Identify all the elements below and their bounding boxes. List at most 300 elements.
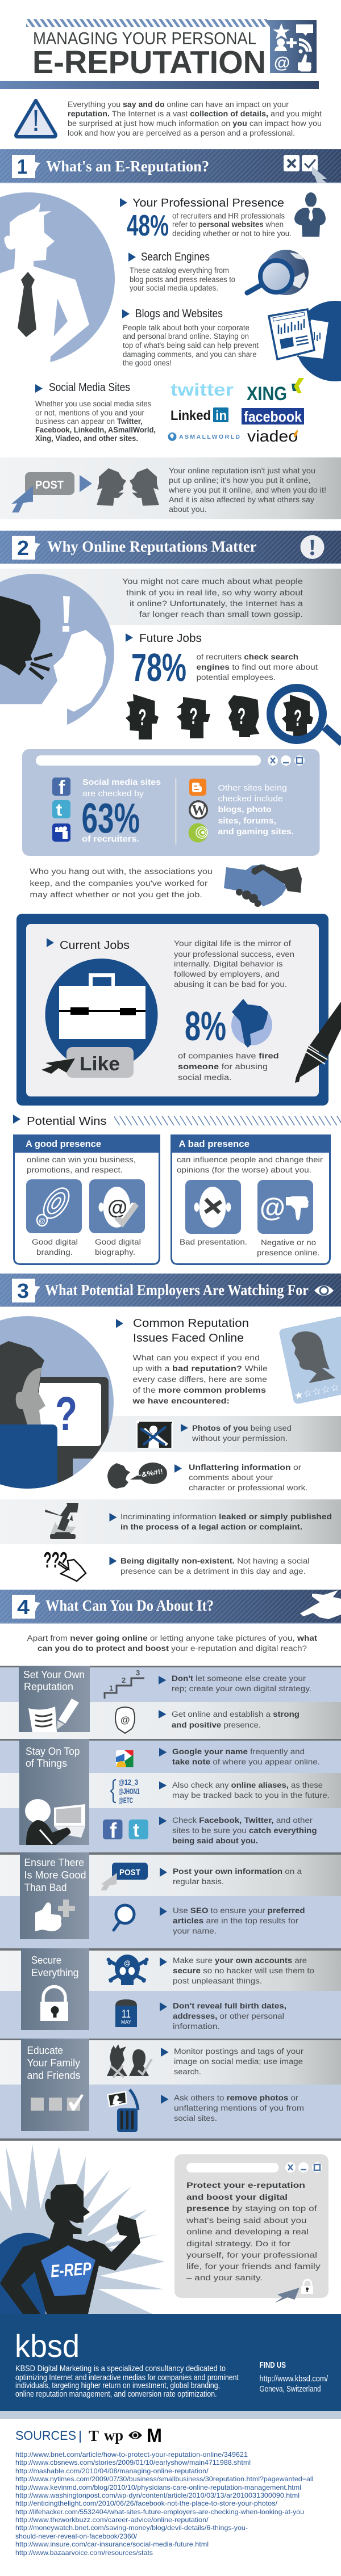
logo: kbsd: kbsd <box>15 2328 80 2364</box>
stat text: Social media sites <box>82 778 161 787</box>
advice: use seo <box>114 1905 305 1935</box>
advice: online aliases <box>111 1777 330 1805</box>
photo row: without your permission. <box>192 1434 288 1443</box>
icon: eye <box>314 1285 334 1296</box>
future jobs: of recruiters check search <box>197 653 298 661</box>
white silhouette <box>0 203 89 397</box>
chest emblem <box>41 2245 95 2296</box>
source links: http://www.bazaarvoice.com/resources/stats <box>15 2549 153 2557</box>
rated profile card <box>278 1314 341 1405</box>
panel: educate family and friends: Educate <box>27 2044 63 2056</box>
other sites text: and gaming sites. <box>218 827 294 837</box>
photo row <box>136 1421 292 1448</box>
source links: http://enticingthelight.com/2010/06/26/facebook-not-the-place-to-store-your-photos/ <box>15 2499 278 2507</box>
source links: http://lifehacker.com/5532404/what-sites-future-employers-are-checking-when-looking-at-you <box>15 2508 304 2516</box>
gray band: photos <box>57 1416 341 1452</box>
caption <box>180 1238 319 1257</box>
caption <box>32 1238 141 1257</box>
cape <box>0 2233 69 2316</box>
advice: secure accounts: secure so no hacker will use them to <box>173 1966 314 1975</box>
text <box>186 2181 321 2282</box>
icon: twitter <box>52 800 70 820</box>
unflattering row: character or professional work. <box>189 1484 308 1492</box>
advice: google your name: Google your name frequently and <box>172 1747 305 1756</box>
common reputation issues: up with a bad reputation? While <box>133 1364 268 1373</box>
panel: good presence: online can win you business, <box>27 1155 136 1164</box>
advice: google your name <box>116 1747 320 1767</box>
source links: http://www.theworkbuzz.com/career-advice/online-reputation/ <box>15 2516 209 2524</box>
text: digital strategy. Do it for <box>186 2239 291 2248</box>
panel: how you post <box>0 457 341 519</box>
unflattering row <box>107 1463 308 1492</box>
tile: bad presentation <box>185 1180 241 1234</box>
icon: thumbs up <box>298 54 311 72</box>
body <box>0 1424 57 1489</box>
advice: post own information: regular basis. <box>173 1877 224 1886</box>
question mark: ? <box>55 1387 77 1440</box>
window buttons <box>285 2162 322 2172</box>
icon: gavel <box>45 1503 78 1539</box>
logo: asmallworld <box>168 432 240 441</box>
text: abusing it can be bad for you. <box>174 980 287 989</box>
panel: more good than bad: Is More Good <box>24 1869 86 1881</box>
social media sites: Whether you use social media sites <box>35 400 151 408</box>
head 2: ? <box>190 703 198 729</box>
caption: presence online. <box>257 1249 319 1257</box>
icon: alias list <box>111 1777 140 1805</box>
your professional presence: Your Professional Presence <box>132 197 284 209</box>
advice: monitor postings: image on social media; use image <box>174 2057 303 2066</box>
social media sites: business can appear on Twitter, <box>35 417 143 426</box>
section 4 intro: can you do to protect and boost your e-reputation and digital reach? <box>38 1644 307 1653</box>
text: Your online reputation isn't just what you <box>169 467 315 475</box>
panel: gossip intro <box>0 569 341 625</box>
associations text: Who you hang out with, the associations you <box>30 867 213 876</box>
icon: twitter <box>128 1819 148 1840</box>
hero silhouette <box>0 2184 140 2314</box>
advice: post own information: Post your own information on a <box>173 1867 302 1876</box>
caption: biography. <box>95 1248 135 1257</box>
other sites text: blogs, photo <box>218 805 272 814</box>
search engines: Search Engines <box>141 251 210 263</box>
advice: check facebook twitter: Check Facebook, Twitter, and other <box>172 1816 313 1825</box>
advice: birth dates: addresses, or other personal <box>173 2012 284 2020</box>
caption: Bad presentation. <box>180 1238 247 1246</box>
icon: thumbs up and plus <box>35 1900 75 1931</box>
icon: pointing hand <box>300 1590 341 1619</box>
common reputation issues: of the more common problems <box>133 1386 266 1394</box>
blogs and websites: People talk about both your corporate <box>123 323 249 332</box>
warning mark <box>34 110 38 131</box>
icon: blogger <box>189 779 206 796</box>
advice: strong presence: Get online and establish a strong <box>172 1710 300 1718</box>
intro text: look and how you are perceived as a person and a professional. <box>68 129 295 137</box>
panel: educate family and friends <box>21 2039 89 2131</box>
panel: set your own reputation: Set Your Own <box>23 1669 85 1680</box>
illustration: person at monitor <box>0 1316 114 1498</box>
panel: more good than bad <box>20 1852 89 1939</box>
logos: publications: M <box>147 2425 162 2447</box>
source links: http://www.insure.com/car-insurance/social-media-future.html <box>15 2540 209 2548</box>
source links: http://mashable.com/2010/04/08/managing-online-reputation/ <box>15 2467 209 2475</box>
panel: gossip intro: think of you in real life, so why worry about <box>126 589 303 597</box>
source links: http://www.washingtonpost.com/wp-dyn/content/article/2010/03/13/ar2010031300090.html <box>15 2491 300 2499</box>
logo: facebook: facebook <box>244 408 302 425</box>
common reputation issues: Issues Faced Online <box>133 1332 244 1344</box>
window buttons <box>268 755 305 766</box>
tile: digital biography <box>89 1179 145 1233</box>
advice: secure accounts: Make sure your own accounts are <box>173 1956 307 1965</box>
icon: skull and crossbones: @ <box>124 1959 131 1967</box>
icon: stairs: 1 <box>109 1684 113 1692</box>
tile: digital branding <box>26 1179 82 1233</box>
post bubble: POST <box>35 479 64 491</box>
logos: publications <box>89 2425 162 2447</box>
icon: google <box>116 1750 134 1767</box>
stat text: 63% <box>82 795 140 842</box>
icon: rss <box>299 38 312 53</box>
arrow <box>80 475 92 492</box>
blogs and websites: the good ones! <box>123 359 172 367</box>
icon: at sign: @ <box>274 54 290 72</box>
panel: bad presence <box>170 1134 331 1264</box>
number badge: 4 <box>17 1595 30 1619</box>
social media sites: or not, mentions of you and your <box>35 409 144 417</box>
logo: linkedin: in <box>215 408 227 423</box>
icon: lock and cursor <box>275 2280 313 2303</box>
icon: shouting head <box>107 1463 167 1489</box>
icon: star <box>273 23 290 39</box>
panel: closing browser callout <box>174 2154 328 2303</box>
advice: create your own: Don't let someone else create your <box>172 1674 306 1683</box>
advice: secure accounts: post unpleasant things. <box>173 1977 262 1985</box>
like button <box>66 1047 134 1078</box>
icon: post button <box>101 1863 148 1890</box>
icon: twitter: t <box>56 801 62 820</box>
stat text <box>82 778 161 844</box>
icon: twitter: t <box>133 1819 139 1840</box>
find us: http://www.kbsd.com/ <box>259 2375 328 2384</box>
tie <box>18 272 36 337</box>
icon: magnifier <box>114 1905 134 1930</box>
icon: padlock <box>40 1986 68 2021</box>
your professional presence: refer to personal websites when <box>172 220 284 229</box>
icon: crossed photo <box>136 1421 173 1448</box>
icon: stairs: 2 <box>122 1676 126 1684</box>
icon: facebook: f <box>59 777 65 799</box>
face <box>16 1368 45 1424</box>
icon: stairs <box>105 1669 144 1699</box>
stat text: someone for abusing <box>178 1062 268 1071</box>
blogs and websites: Blogs and Websites <box>135 308 223 320</box>
number badge <box>12 536 40 560</box>
text: online and developing a real <box>186 2228 309 2236</box>
intro text: be surprised at just how much information on you can impact how you <box>68 119 322 128</box>
non-existent row: Being digitally non-existent. Not having a social <box>120 1557 310 1565</box>
advice: birth dates: information. <box>173 2022 220 2031</box>
icon: alias list: @JHON1 <box>118 1787 140 1796</box>
panel: good presence <box>13 1134 160 1264</box>
blogs and websites: and personal brand online. Staying on <box>123 332 249 341</box>
icon: shield <box>115 1707 135 1733</box>
panel: good presence: promotions, and respect. <box>27 1166 123 1174</box>
head 1: ? <box>139 704 147 730</box>
common reputation issues: every case differs, here are some <box>133 1375 267 1384</box>
advice: monitor postings: search. <box>174 2067 201 2076</box>
icon: wordpress <box>189 800 208 820</box>
logo: linkedin: Linked <box>170 408 211 423</box>
intro text: reputation. The Internet is a vast collection of details, and you might <box>68 110 322 118</box>
caption: branding. <box>36 1248 73 1257</box>
shout rays <box>30 654 52 679</box>
logos: publications: T <box>89 2427 99 2444</box>
advice: remove photos: Ask others to remove photos or <box>174 2094 299 2102</box>
non-existent row <box>43 1548 310 1581</box>
icon: photo in trash <box>107 2090 138 2132</box>
panel: gossip intro: it online? Unfortunately, the Internet has a <box>130 599 303 608</box>
section 4 intro <box>27 1634 318 1653</box>
icon: alias list: @12_3 <box>118 1777 138 1787</box>
title <box>32 28 266 81</box>
icon: stairs: 3 <box>136 1669 140 1677</box>
intro text: Everything you say and do online can have an impact on your <box>68 100 289 109</box>
your professional presence: of recruiters and HR professionals <box>172 212 285 220</box>
other sites text: Other sites being <box>218 784 287 793</box>
advice: create your own <box>105 1669 311 1699</box>
panel: bad presence: can influence people and change their <box>177 1155 323 1164</box>
about text: online reputation management, and conversion rate optimization. <box>15 2390 217 2399</box>
advice: use seo: articles are in the top results for <box>173 1917 299 1925</box>
social media sites <box>35 381 156 443</box>
stat text: of recruiters. <box>82 835 139 844</box>
footer panel <box>0 2314 341 2419</box>
advice: use seo: Use SEO to ensure your preferred <box>173 1906 305 1915</box>
advice: check facebook twitter: being said about you. <box>172 1837 258 1845</box>
associations text: may affect whether or not you get the job. <box>30 890 202 899</box>
incriminating row: Incriminating information leaked or simply published <box>120 1512 332 1521</box>
cursor <box>41 1058 75 1074</box>
about text <box>15 2364 239 2399</box>
listener <box>34 630 106 732</box>
panel: current jobs <box>16 914 341 1106</box>
talking heads <box>97 468 159 506</box>
section 3 title: What Potential Employers Are Watching For <box>45 1281 309 1298</box>
icon: paper and pencil <box>28 1699 79 1732</box>
logo: xing: XING <box>247 383 287 405</box>
common reputation issues: What can you expect if you end <box>133 1354 260 1362</box>
icon: exclamation <box>300 535 324 559</box>
icon: facebook: f <box>110 1819 117 1842</box>
icon: calendar: MAY <box>121 2019 131 2025</box>
advice: monitor postings <box>107 2044 304 2078</box>
icon: magnifier over globe <box>247 250 309 295</box>
common reputation issues: Common Reputation <box>133 1317 249 1330</box>
magnified head 4: ? <box>294 705 302 731</box>
head 3: ? <box>238 703 246 729</box>
text <box>174 939 294 989</box>
icon: briefcase with like: Like <box>80 1053 120 1075</box>
advice: remove photos: unflattering mentions of you from <box>174 2104 304 2112</box>
icon: thumbs down <box>231 999 272 1048</box>
incriminating row: in the process of a legal action or complaint. <box>120 1523 302 1531</box>
icon: facebook <box>103 1819 123 1842</box>
photo row: Photos of you being used <box>192 1424 292 1432</box>
section 4 header <box>0 1590 341 1624</box>
source links: http://www.kevinmd.com/blog/2010/10/physicians-care-online-reputation-management.html <box>15 2483 301 2491</box>
number badge <box>12 155 40 178</box>
potential wins heading <box>13 1115 341 1128</box>
advice: online aliases: may be tracked back to you in the future. <box>172 1791 330 1800</box>
caption: Negative or no <box>261 1238 316 1247</box>
logo: xing <box>247 378 304 405</box>
panel: browser window stats <box>22 749 319 856</box>
illustration: whispering heads in circle <box>0 574 114 738</box>
text: And it is also affected by what others say <box>169 495 314 504</box>
burst rays <box>0 2144 165 2314</box>
unknown heads <box>126 688 341 743</box>
shouting head <box>0 596 40 675</box>
stat text: social media. <box>178 1073 232 1082</box>
panel: secure everything: Everything <box>31 1966 78 1978</box>
sources heading: SOURCES <box>15 2428 76 2443</box>
section 4 intro: Apart from never going online or letting anyone take pictures of you, what <box>27 1634 318 1642</box>
icon: calendar <box>115 1999 137 2027</box>
hair <box>0 1341 44 1424</box>
text: what's being said about you <box>186 2216 307 2225</box>
future jobs <box>126 632 318 690</box>
icon: person at laptop <box>25 1799 85 1845</box>
logo: asmallworld: ASMALLWORLD <box>179 434 240 440</box>
caption: Good digital <box>95 1238 141 1246</box>
icon: warning triangle <box>16 100 56 137</box>
advice: create your own: rep; create your own digital strategy. <box>172 1684 311 1693</box>
icon: green swirl <box>189 823 208 842</box>
tile: negative presence <box>257 1180 313 1234</box>
icon: handshake <box>224 864 302 907</box>
post bubble <box>25 472 74 495</box>
section 2 title: Why Online Reputations Matter <box>47 538 257 555</box>
panel: stay on top of things: Stay On Top <box>26 1745 80 1757</box>
panel: secure everything: Secure <box>31 1954 61 1966</box>
header title stripes <box>26 19 267 27</box>
section 1 header <box>0 149 341 183</box>
text: life, for your friends and family <box>186 2262 321 2271</box>
common reputation issues <box>116 1317 268 1405</box>
source links: http://www.cbsnews.com/stories/2009/01/10/earlyshow/main4711988.shtml <box>15 2459 251 2466</box>
panel: good presence: A good presence <box>26 1139 101 1149</box>
section 1 title: What's an E-Reputation? <box>46 158 209 175</box>
heading: Current Jobs <box>60 939 130 952</box>
advice: secure accounts <box>107 1955 314 1985</box>
your professional presence <box>120 197 292 242</box>
text: presence by staying on top of <box>186 2204 317 2213</box>
icon: wordpress: W <box>192 802 206 818</box>
blogs and websites <box>122 308 259 367</box>
stat text: of companies have fired <box>178 1052 279 1060</box>
arm gap <box>53 299 68 337</box>
number badge <box>12 1595 40 1619</box>
about text: optimizing Internet and interactive medias for companies and prominent <box>15 2373 239 2382</box>
panel: educate family and friends: Your Family <box>27 2057 81 2069</box>
illustration: businessman in circle <box>0 192 115 397</box>
icon: myspace <box>52 823 70 842</box>
search engines: blog posts and press releases to <box>130 275 235 284</box>
monitor <box>34 1377 109 1498</box>
icon: alias list: @ETC <box>118 1796 133 1805</box>
logo: viadeo: viadeo <box>247 427 298 445</box>
advice: monitor postings: Monitor postings and tags of your <box>174 2047 304 2056</box>
icon: pen <box>295 1002 341 1083</box>
panel: stay on top of things <box>19 1739 89 1845</box>
advice: remove photos <box>107 2090 304 2132</box>
head 2 <box>177 697 210 738</box>
icon: skull and crossbones <box>107 1955 149 1985</box>
logo: twitter: twitter <box>170 380 234 400</box>
about text: KBSD Digital Marketing is a specialized consultancy dedicated to <box>15 2364 226 2373</box>
panel: secure everything <box>21 1948 89 2030</box>
advice: strong presence <box>115 1707 300 1733</box>
text: Protect your e-reputation <box>186 2181 305 2190</box>
text <box>168 467 326 514</box>
icon: shouting head: ~&%#!! <box>136 1467 164 1480</box>
text: yourself, for your professional <box>186 2251 317 2259</box>
header bar <box>0 81 319 89</box>
source links: should-never-reveal-on-facebook/2360/ <box>15 2532 138 2540</box>
advice: remove photos: social sites. <box>174 2114 217 2123</box>
future jobs: Future Jobs <box>139 632 202 645</box>
number badge: 1 <box>17 155 27 178</box>
social media sites: Xing, Viadeo, and other sites. <box>35 434 138 443</box>
panel: more good than bad: Than Bad <box>24 1881 67 1893</box>
source links: http://www.nytimes.com/2009/07/30/business/smallbusiness/30reputation.html?pagewanted=all <box>15 2475 313 2483</box>
chest emblem: E-REP <box>50 2259 92 2281</box>
exclamation <box>63 596 70 632</box>
panel: more good than bad: Ensure There <box>24 1856 84 1868</box>
unflattering row: comments about your <box>189 1473 273 1482</box>
logos: publications: wp <box>104 2427 123 2444</box>
icon: add person <box>275 38 297 51</box>
icon: suited person <box>294 192 326 237</box>
associations text: keep, and the companies you've worked for <box>30 879 208 888</box>
advice: birth dates: Don't reveal full birth dates, <box>173 2002 286 2010</box>
other sites text: checked include <box>218 795 283 804</box>
non-existent row: presence can be a detriment in this day and age. <box>120 1567 306 1575</box>
search engines: your social media updates. <box>130 284 218 292</box>
find us: Geneva, Switzerland <box>259 2385 321 2394</box>
panel: set your own reputation: Reputation <box>24 1680 73 1692</box>
sources heading <box>15 2425 162 2447</box>
text: about you. <box>169 505 207 514</box>
number badge: 3 <box>17 1279 29 1302</box>
text: – and your sanity. <box>186 2274 263 2282</box>
panel: educate family and friends: and Friends <box>27 2069 81 2081</box>
find us: FIND US <box>259 2361 286 2370</box>
about text: individuals, targeting higher return on investment, global branding, <box>15 2381 220 2390</box>
icon: calendar: 11 <box>122 2008 131 2020</box>
title: MANAGING YOUR PERSONAL <box>33 28 256 48</box>
source links: http://moneywatch.bnet.com/saving-money/blog/devil-details/6-things-you- <box>15 2524 248 2532</box>
caption: Good digital <box>32 1238 78 1246</box>
section 3 header <box>0 1274 341 1307</box>
panel: bad presence: opinions (for the worse) about you. <box>177 1166 311 1174</box>
text: Your digital life is the mirror of <box>174 939 291 948</box>
icon: briefcase with like <box>41 959 158 1078</box>
text: where you put it online, and when you do it! <box>168 486 326 494</box>
incriminating row <box>0 1499 341 1544</box>
stat 8%: 8% <box>185 1004 226 1049</box>
stat 48%: 48% <box>127 209 169 242</box>
tile: digital biography: @ <box>107 1196 127 1219</box>
